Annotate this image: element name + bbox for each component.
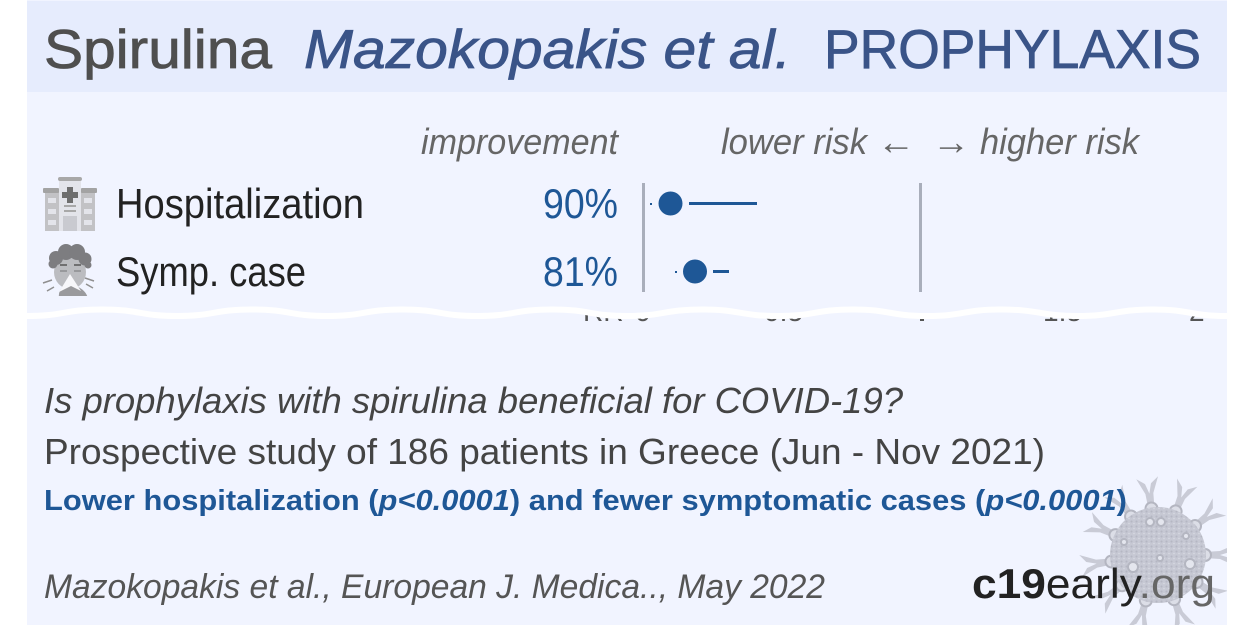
forest plot <box>642 183 922 292</box>
question: Is prophylaxis with spirulina beneficial for COVID-19? <box>44 380 903 421</box>
title <box>44 18 1201 80</box>
axis line: RR 1 <box>919 183 922 292</box>
icon: sneezing person <box>43 244 94 298</box>
column header: risk direction <box>721 121 1141 162</box>
axis labels, torn <box>585 315 1204 322</box>
axis labels, torn: 0.5 <box>764 296 803 327</box>
icon: virus <box>1079 476 1236 627</box>
value: 90%: 90% <box>543 180 618 227</box>
axis line: RR 0 <box>642 183 645 292</box>
axis labels, torn: 1.5 <box>1043 296 1082 327</box>
study description: Prospective study of 186 patients in Greece (Jun - Nov 2021) <box>44 431 1045 472</box>
axis labels, torn: 0 <box>635 296 651 327</box>
title: Spirulina <box>44 18 272 80</box>
key finding: Lower hospitalization ( p<0.0001 ) and fewer symptomatic cases ( p<0.0001 ) <box>44 485 1127 517</box>
axis labels, torn: RR <box>583 296 623 327</box>
column header: improvement: improvement <box>421 121 620 162</box>
column header: risk direction: higher risk <box>980 121 1141 162</box>
column header: risk direction: ← <box>877 121 915 162</box>
result: hospitalization <box>650 192 757 216</box>
icon: hospital <box>43 177 97 231</box>
logo: c19early.org: c19early.org <box>972 560 1215 607</box>
title: PROPHYLAXIS <box>824 18 1201 80</box>
axis labels, torn: 1 <box>917 296 933 327</box>
value: 81%: 81% <box>543 248 618 295</box>
header band <box>27 1 1227 92</box>
label: Hospitalization: Hospitalization <box>116 180 364 227</box>
column header: risk direction: → <box>932 121 970 162</box>
axis labels, torn: 2+ <box>1189 296 1221 327</box>
label: Symp. case: Symp. case <box>116 248 306 295</box>
torn paper edge <box>27 310 1227 316</box>
title: Mazokopakis et al. <box>304 18 791 80</box>
citation: Mazokopakis et al., European J. Medica.., May 2022 <box>44 568 825 606</box>
torn paper cover <box>27 296 1227 316</box>
result: symptomatic case <box>675 260 729 284</box>
column header: risk direction: lower risk <box>721 121 869 162</box>
